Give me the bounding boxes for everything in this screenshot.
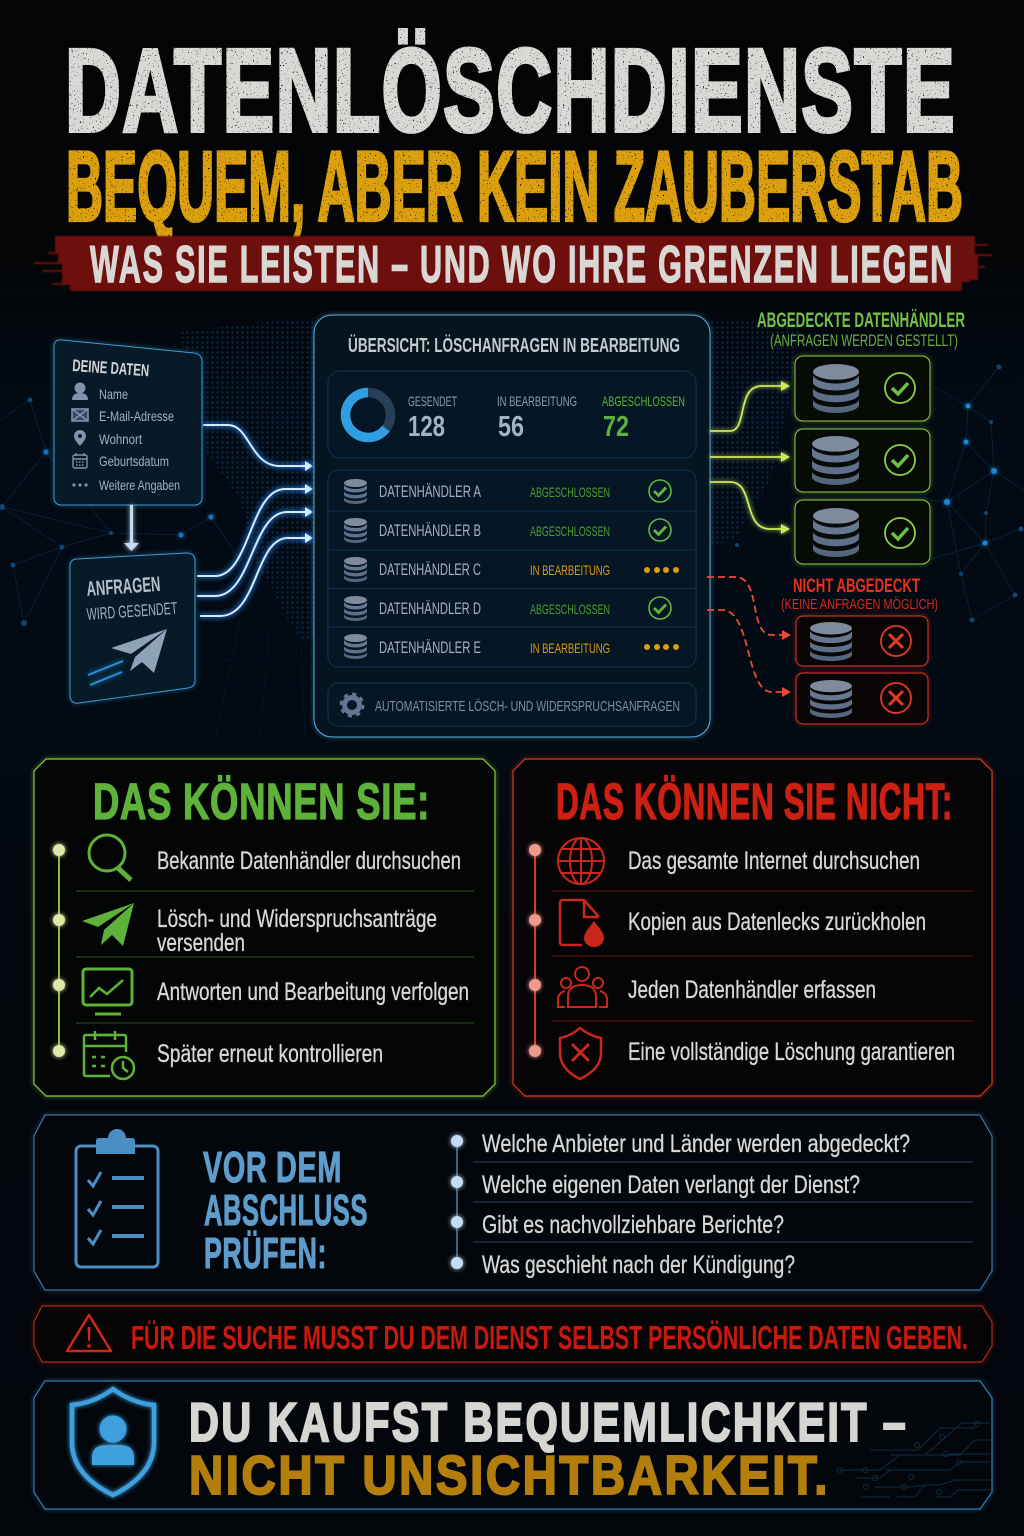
icon: person	[72, 382, 88, 400]
label: email: E-Mail-Adresse	[99, 408, 174, 424]
label: more: Weitere Angaben	[99, 477, 180, 493]
question 1: Welche Anbieter und Länder werden abgedeckt?	[482, 1130, 910, 1158]
question 4: Was geschieht nach der Kündigung?	[482, 1251, 795, 1279]
heading	[203, 1143, 368, 1278]
automation footer: AUTOMATISIERTE LÖSCH- UND WIDERSPRUCHSANFRAGEN	[375, 697, 680, 715]
timeline	[451, 1135, 973, 1269]
icon: paper plane	[88, 629, 167, 685]
world map dots	[180, 318, 800, 640]
heading: ÜBERSICHT: LÖSCHANFRAGEN IN BEARBEITUNG	[348, 334, 680, 357]
heading: VOR DEM	[203, 1143, 342, 1192]
row D: ABGESCHLOSSEN	[530, 601, 610, 617]
icon: clipboard	[76, 1129, 158, 1267]
subheading: WIRD GESENDET	[86, 599, 178, 624]
row C: DATENHÄNDLER C	[379, 560, 481, 579]
covered heading	[757, 309, 965, 350]
card 2	[796, 673, 928, 724]
panel: anfragen	[70, 553, 195, 703]
arrows: data to overview	[197, 425, 313, 616]
warning bar	[34, 1306, 992, 1362]
panel: das können sie nicht	[513, 759, 992, 1096]
title	[65, 25, 963, 242]
row B	[344, 518, 671, 543]
panel: das können sie	[34, 759, 495, 1096]
text: item 3: Antworten und Bearbeitung verfolgen	[157, 978, 469, 1006]
row D	[344, 596, 671, 621]
network left	[0, 400, 240, 623]
row B: ABGESCHLOSSEN	[530, 523, 610, 539]
row A: DATENHÄNDLER A	[379, 482, 481, 501]
icon: mail	[72, 409, 88, 421]
card 3	[795, 500, 930, 564]
stat: sent: GESENDET	[408, 393, 457, 409]
card 2	[795, 429, 930, 492]
timeline	[529, 844, 973, 1057]
icon: paper plane	[82, 903, 134, 946]
arrow: down	[124, 505, 139, 551]
stat: processing	[497, 393, 577, 443]
stat: processing: 56	[498, 411, 524, 443]
subtitle banner	[34, 236, 992, 294]
perspective grid	[170, 620, 312, 740]
row C	[344, 557, 679, 582]
label: birthday: Geburtsdatum	[99, 453, 169, 469]
icon: warning triangle	[67, 1315, 111, 1351]
card 1	[795, 356, 930, 421]
question 3: Gibt es nachvollziehbare Berichte?	[482, 1211, 784, 1239]
panel: deine Daten	[54, 340, 202, 505]
text: item 2: Kopien aus Datenlecks zurückholen	[628, 908, 926, 936]
conclusion line 2: NICHT UNSICHTBARKEIT.	[189, 1444, 830, 1506]
row E	[344, 634, 679, 659]
stat: done	[602, 393, 685, 443]
panel: vor dem abschluss	[34, 1115, 992, 1290]
icon: globe	[558, 838, 604, 884]
row A: ABGESCHLOSSEN	[530, 484, 610, 500]
icon: pin	[74, 430, 86, 446]
heading: ABSCHLUSS	[204, 1186, 368, 1235]
card 1	[796, 616, 928, 666]
icon: calendar clock	[84, 1031, 134, 1079]
stat: sent: 128	[408, 411, 445, 443]
row E: DATENHÄNDLER E	[379, 638, 481, 657]
stat: done: ABGESCHLOSSEN	[602, 393, 685, 409]
not covered subheading: (KEINE ANFRAGEN MÖGLICH)	[781, 595, 938, 613]
row A	[344, 479, 671, 504]
network right	[928, 367, 1024, 620]
text: item 2: Lösch- und Widerspruchsanträge	[157, 905, 437, 933]
icon: people	[558, 967, 607, 1007]
stat: done: 72	[603, 411, 629, 443]
row E: IN BEARBEITUNG	[530, 640, 610, 656]
icon: magnifier	[89, 835, 131, 880]
arrows: red dashed	[707, 577, 791, 697]
arrows: green covered	[710, 381, 790, 534]
covered broker cards	[795, 356, 930, 564]
icon: shield x	[560, 1028, 601, 1079]
stat: processing: IN BEARBEITUNG	[497, 393, 577, 409]
broker list	[328, 470, 696, 667]
not covered broker cards	[796, 616, 928, 724]
row D: DATENHÄNDLER D	[379, 599, 481, 618]
row C: IN BEARBEITUNG	[530, 562, 610, 578]
row B: DATENHÄNDLER B	[379, 521, 481, 540]
label: place: Wohnort	[99, 431, 142, 447]
text: item 1: Bekannte Datenhändler durchsuchen	[157, 847, 461, 875]
timeline	[53, 844, 474, 1057]
icon: monitor	[83, 969, 132, 1014]
stat: sent	[408, 393, 457, 443]
panel: overview dashboard	[314, 315, 710, 737]
text: item 4: Später erneut kontrollieren	[157, 1040, 383, 1068]
label: name: Name	[99, 386, 128, 402]
donut chart	[346, 392, 390, 438]
heading: ANFRAGEN	[86, 573, 161, 601]
automation footer	[328, 683, 696, 726]
icon: calendar	[73, 453, 87, 468]
heading: DEINE DATEN	[72, 356, 150, 380]
text: item 1: Das gesamte Internet durchsuchen	[628, 847, 920, 875]
text: item 3: Jeden Datenhändler erfassen	[628, 976, 876, 1004]
text: item 2	[157, 905, 437, 957]
panel: conclusion	[34, 1381, 992, 1509]
circuit decoration	[838, 1422, 990, 1497]
heading: PRÜFEN:	[204, 1229, 327, 1278]
icon: document leak	[560, 900, 604, 947]
not covered heading	[781, 576, 938, 613]
text: item 2: versenden	[157, 929, 245, 957]
question 2: Welche eigenen Daten verlangt der Dienst?	[482, 1171, 860, 1199]
icon: more	[72, 483, 88, 487]
icon: shield with person	[72, 1389, 154, 1495]
stats box	[328, 371, 696, 458]
heading: DAS KÖNNEN SIE:	[93, 773, 430, 830]
not covered heading: NICHT ABGEDECKT	[793, 576, 920, 597]
